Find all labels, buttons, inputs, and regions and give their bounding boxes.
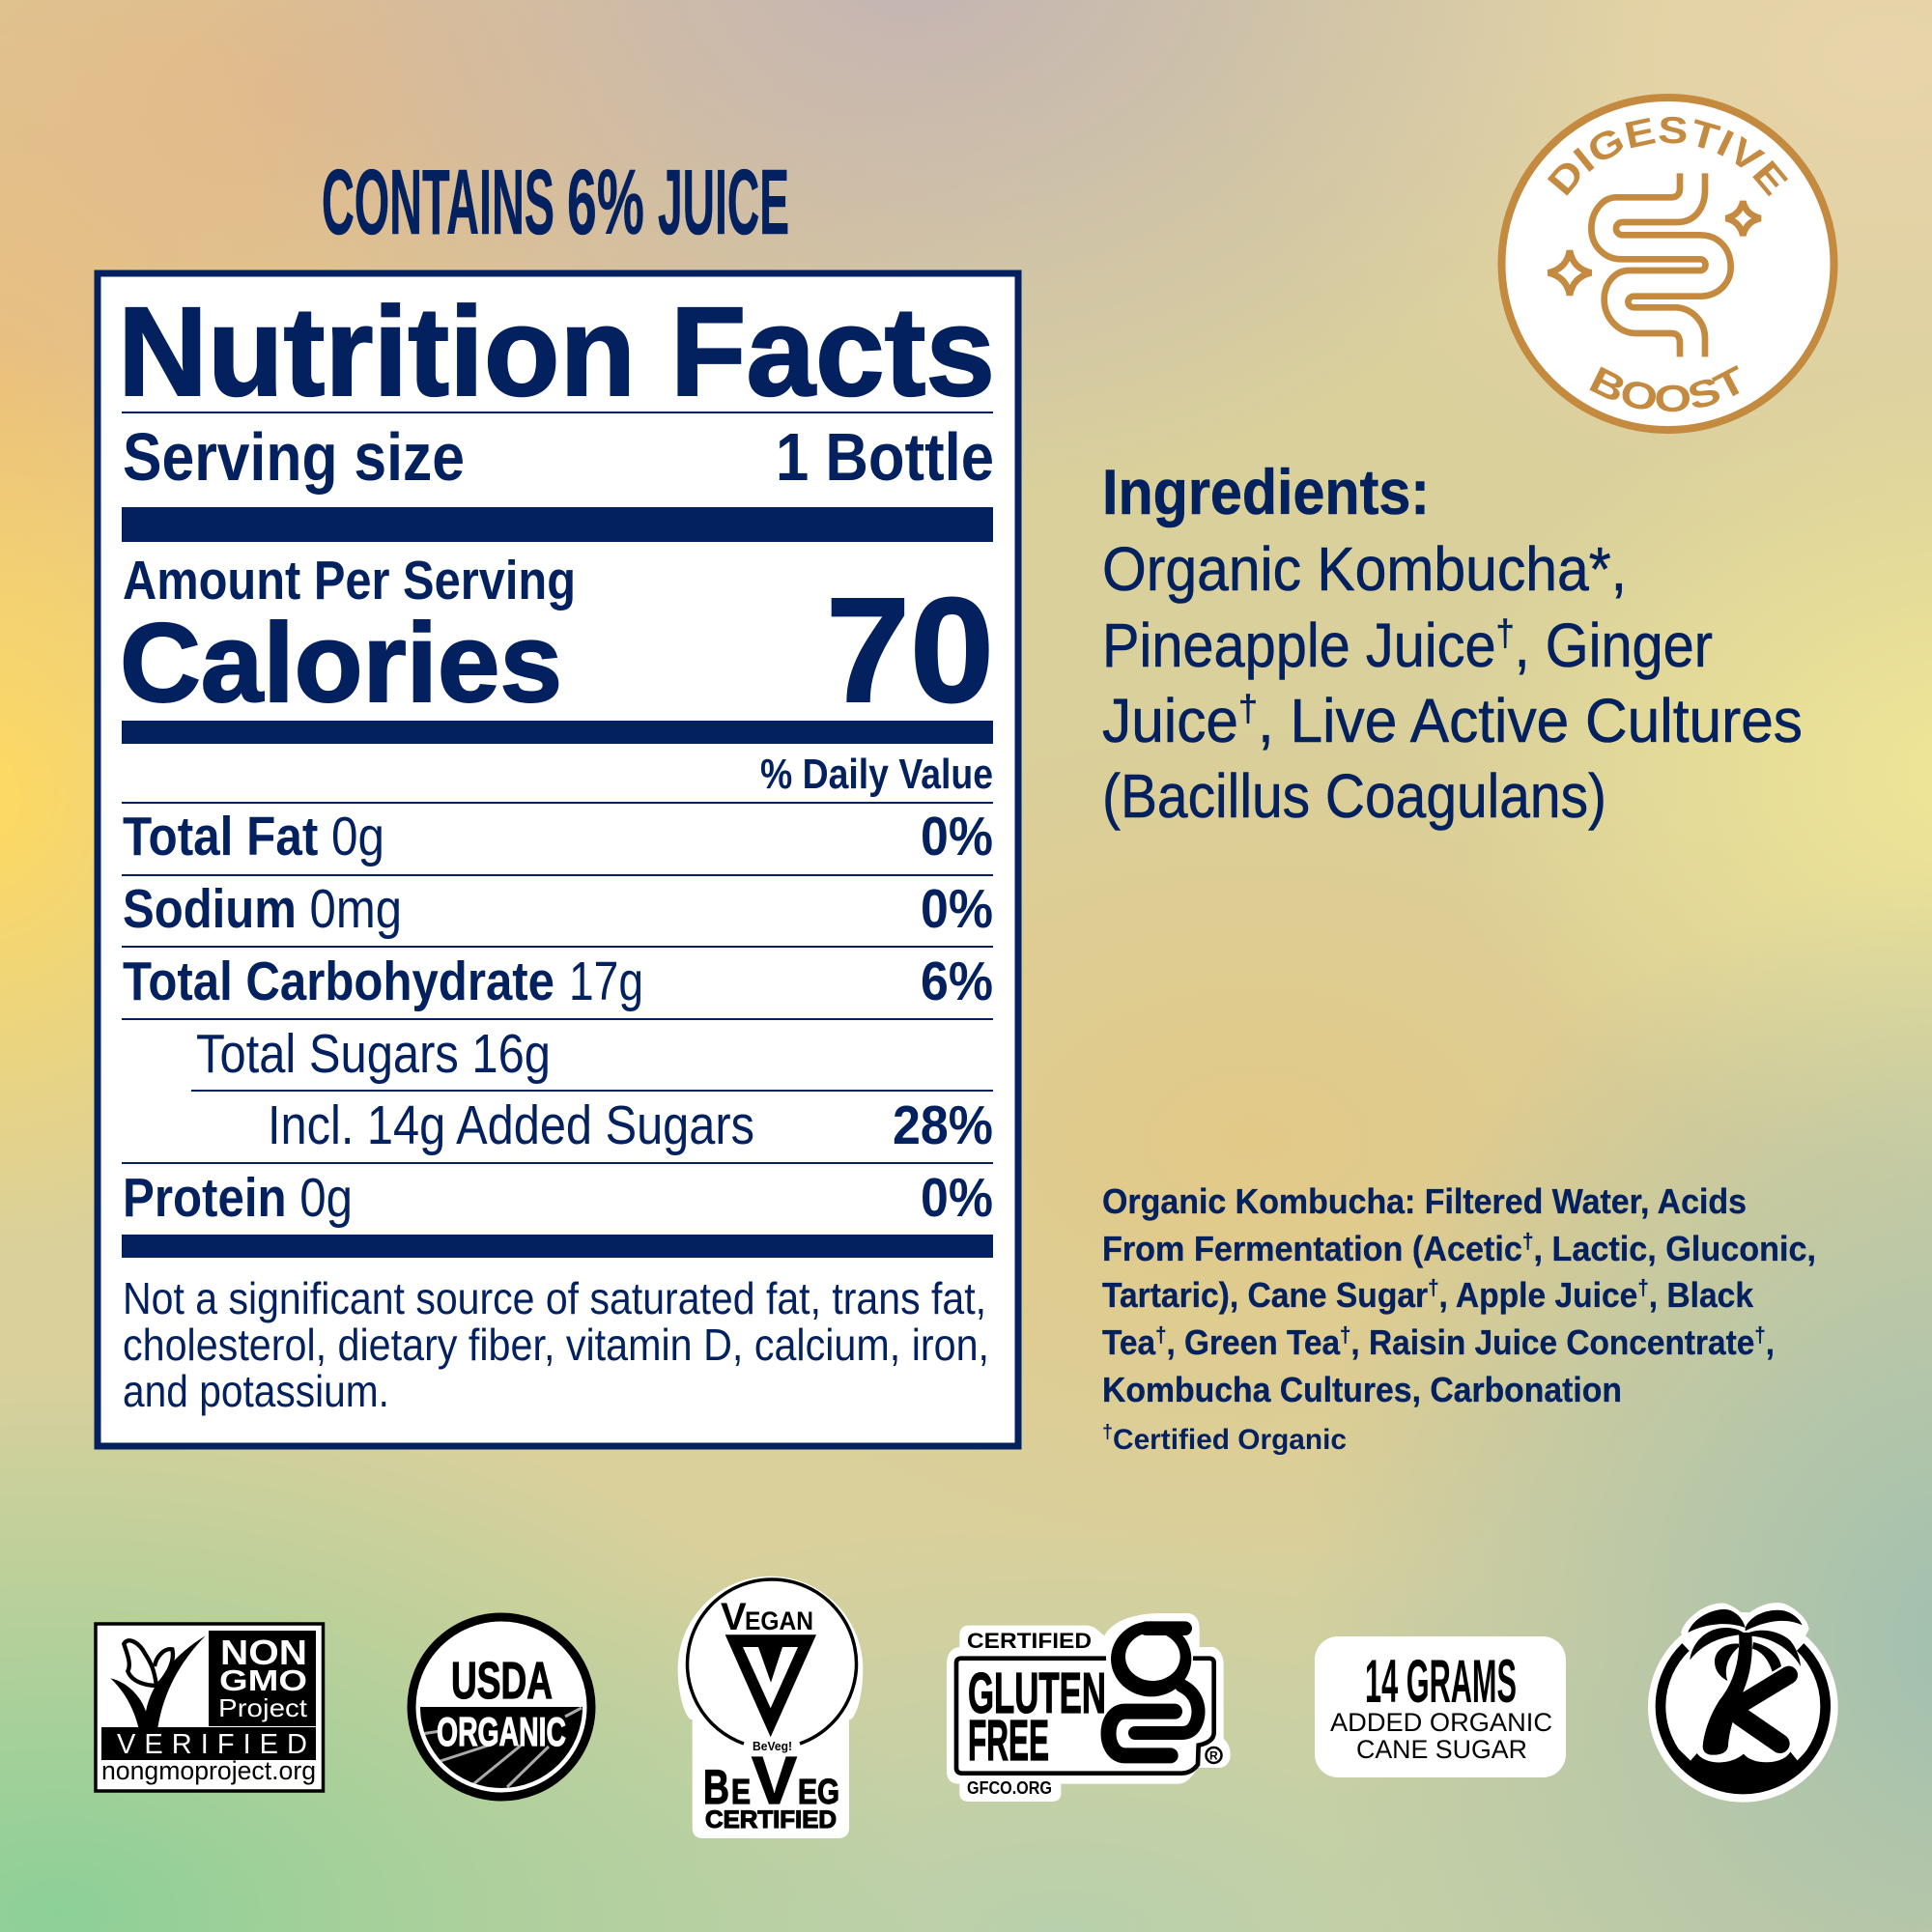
organic kombucha sub-ingredients: ,	[1766, 1322, 1775, 1362]
row: total fat: 0%	[921, 806, 993, 867]
row: sodium: Sodium 0mg	[123, 878, 402, 940]
vegan wordmark	[721, 1596, 813, 1638]
row: protein: Protein 0g	[123, 1167, 353, 1229]
calories row	[120, 567, 994, 733]
badge: certified gluten free: GFCO.ORG	[967, 1778, 1052, 1798]
badge: certified gluten free: FREE	[968, 1709, 1049, 1773]
organic kombucha sub-ingredients: From Fermentation (Acetic	[1102, 1229, 1545, 1268]
ingredients block	[1102, 456, 1803, 831]
beveg wordmark: E	[798, 1772, 817, 1811]
serving size row	[123, 419, 994, 495]
badge: certified gluten free: CERTIFIED	[967, 1629, 1092, 1653]
organic kombucha sub-ingredients: Tartaric), Cane Sugar	[1102, 1275, 1451, 1315]
icon: K trunk and arms	[1703, 1633, 1789, 1755]
badge text: boost: BOOST	[1590, 365, 1739, 412]
badge: 14 grams added organic cane sugar: CANE SUGAR	[1356, 1735, 1527, 1764]
ingredients block: †	[1238, 689, 1258, 729]
badge: beveg vegan certified: BeVeg!	[753, 1739, 792, 1753]
badge: beveg vegan certified: CERTIFIED	[705, 1806, 837, 1833]
serving size row: Serving size	[123, 419, 465, 495]
badge: non gmo project verified: nongmoproject.org	[101, 1756, 316, 1785]
organic kombucha sub-ingredients: Kombucha Cultures, Carbonation	[1102, 1370, 1622, 1409]
badge: 14 grams added organic cane sugar: ADDED ORGANIC	[1330, 1708, 1552, 1737]
row: protein	[123, 1167, 993, 1229]
badge: digestive boost	[1497, 94, 1837, 434]
beveg wordmark: E	[731, 1772, 751, 1811]
beveg wordmark: B	[703, 1760, 729, 1814]
icon: vegan v triangle	[725, 1634, 816, 1737]
organic kombucha sub-ingredients: , Apple Juice	[1438, 1275, 1637, 1315]
organic kombucha sub-ingredients: †	[1522, 1229, 1534, 1253]
ingredients block: Pineapple Juice	[1102, 611, 1539, 680]
registered mark	[1206, 1747, 1221, 1763]
badge: non gmo project verified	[96, 1624, 323, 1791]
row: protein: 0%	[921, 1167, 993, 1229]
organic kombucha sub-ingredients: , Black	[1649, 1275, 1754, 1315]
row: total carbohydrate: 17g	[569, 951, 643, 1012]
organic kombucha sub-ingredients: †	[1428, 1275, 1438, 1299]
panel: nutrition facts	[98, 273, 1018, 1446]
organic kombucha sub-ingredients: †	[1637, 1275, 1649, 1299]
organic kombucha sub-ingredients: Tea	[1102, 1322, 1159, 1362]
certified organic note: †	[1102, 1422, 1113, 1443]
calories row: Calories	[120, 600, 562, 725]
title: nutrition facts: Nutrition Facts	[118, 280, 995, 422]
badge: usda organic	[412, 1617, 591, 1804]
organic kombucha sub-ingredients: Organic Kombucha: Filtered Water, Acids	[1102, 1181, 1747, 1221]
row: added sugars: 28%	[893, 1094, 993, 1156]
footnote: and potassium.	[123, 1366, 389, 1416]
daily value header: % Daily Value	[760, 751, 993, 798]
organic kombucha sub-ingredients: , Lactic, Gluconic,	[1534, 1229, 1816, 1268]
heading: contains 6% juice: CONTAINS	[322, 151, 554, 254]
row: added sugars: Incl. 14g Added Sugars	[268, 1094, 754, 1156]
badge: palm tree k logo	[1648, 1603, 1838, 1803]
heading: contains 6% juice: 6%	[567, 151, 644, 254]
vegan wordmark: EGAN	[745, 1606, 813, 1635]
badge text: digestive: DIGESTIVE	[1548, 116, 1789, 197]
row: total fat: Total Fat 0g	[123, 806, 384, 867]
badge: usda organic: ORGANIC	[437, 1709, 566, 1754]
vegan wordmark: V	[721, 1596, 747, 1638]
badge: usda organic: USDA	[451, 1652, 553, 1710]
footnote: Not a significant source of saturated fat, trans fat,	[123, 1273, 986, 1323]
row: total sugars: Total Sugars 16g	[196, 1023, 551, 1085]
ingredients block: Juice	[1102, 686, 1246, 755]
infographic canvas: JUICE	[658, 151, 789, 254]
badge: certified gluten free	[947, 1613, 1231, 1802]
badge: non gmo project verified: NON	[220, 1633, 307, 1672]
badge: beveg vegan certified	[678, 1577, 863, 1838]
ingredients block: Ingredients:	[1102, 456, 1430, 527]
footnote: cholesterol, dietary fiber, vitamin D, calcium, iron,	[123, 1320, 989, 1370]
organic kombucha sub-ingredients: , Raisin Juice Concentrate	[1350, 1322, 1754, 1362]
organic kombucha sub-ingredients: †	[1340, 1322, 1350, 1347]
beveg wordmark: G	[817, 1772, 839, 1811]
row: total carbohydrate: 6%	[921, 951, 993, 1012]
ingredients block: †	[1496, 613, 1515, 654]
badge: non gmo project verified: Project	[218, 1693, 308, 1722]
organic kombucha sub-ingredients	[1102, 1181, 1816, 1456]
badge: non gmo project verified: VERIFIED	[117, 1729, 307, 1760]
icon: plant and butterfly	[110, 1635, 206, 1727]
row: sodium	[123, 878, 993, 940]
row: total fat	[123, 806, 993, 867]
badge: 14 grams added organic cane sugar	[1315, 1636, 1566, 1777]
organic kombucha sub-ingredients: , Green Tea	[1166, 1322, 1341, 1362]
icon: g serpentine	[1108, 1621, 1198, 1755]
icon: palm fronds	[1688, 1609, 1803, 1681]
certified organic note: Certified Organic	[1113, 1424, 1347, 1456]
ingredients block: , Live Active Cultures	[1258, 686, 1803, 755]
calories row: 70	[826, 567, 994, 733]
beveg wordmark: V	[752, 1743, 797, 1818]
ingredients block: Organic Kombucha*,	[1102, 534, 1627, 604]
badge: 14 grams added organic cane sugar: 14 GRAMS	[1365, 1648, 1517, 1716]
beveg wordmark	[703, 1743, 839, 1818]
badge: non gmo project verified: GMO	[219, 1663, 307, 1697]
serving size row: 1 Bottle	[776, 419, 994, 495]
ingredients block: , Ginger	[1515, 611, 1713, 680]
organic kombucha sub-ingredients: †	[1155, 1322, 1166, 1347]
row: total carbohydrate: Total Carbohydrate	[123, 951, 554, 1012]
row: total carbohydrate	[123, 951, 993, 1012]
footnote	[123, 1273, 989, 1416]
icon: intestine with sparkles	[1548, 173, 1761, 356]
row: sodium: 0%	[921, 878, 993, 940]
organic kombucha sub-ingredients: †	[1754, 1322, 1766, 1347]
ingredients block: (Bacillus Coagulans)	[1102, 761, 1606, 831]
amount per serving: Amount Per Serving	[123, 550, 576, 611]
badge: certified gluten free: GLUTEN	[968, 1662, 1106, 1725]
registered mark: R	[1209, 1748, 1218, 1762]
